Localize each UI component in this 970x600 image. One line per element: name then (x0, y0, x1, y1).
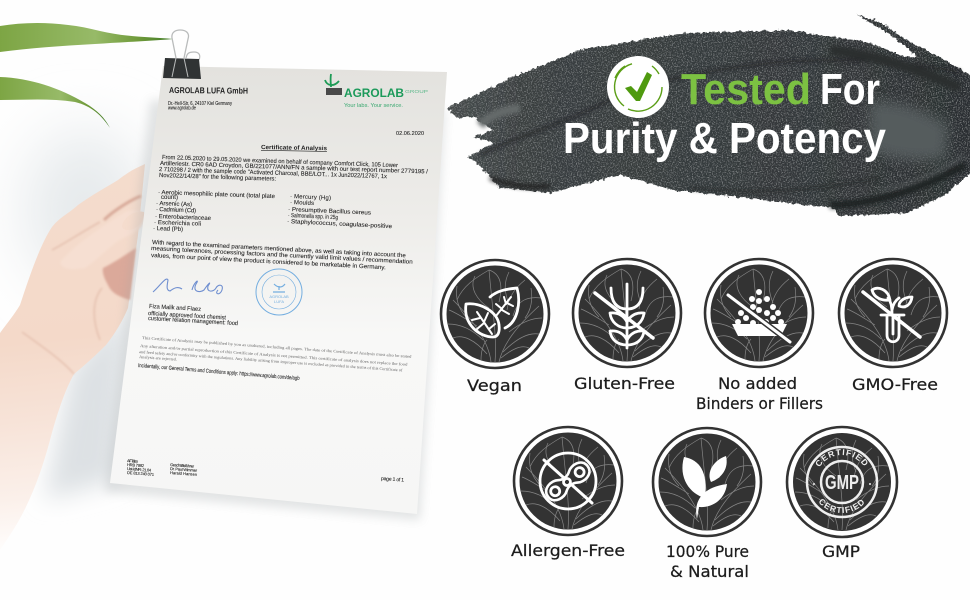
badge: vegan (441, 260, 549, 368)
footer address: Harald Hansen (170, 470, 197, 477)
agrolab logo: AGROLAB (344, 86, 404, 100)
signatory: customer relation management: food (148, 316, 238, 327)
agrolab logo (325, 74, 428, 109)
label: 100% pure and natural: & Natural (670, 562, 749, 581)
parameter list left (153, 190, 276, 233)
label: gmo-free: GMO-Free (852, 375, 938, 394)
footer address: Geschäftsführer (170, 462, 195, 469)
conclusion paragraph: With regard to the examined parameters mentioned above, as well as taking into account the (152, 240, 407, 259)
badge: allergen-free (514, 427, 622, 535)
icon: green check badge (607, 56, 669, 118)
badge: gmp (786, 426, 898, 538)
parameter list right: · Salmonella spp. in 25g (288, 213, 338, 221)
icon: crossed wheat (595, 284, 653, 348)
brush highlight (870, 102, 948, 160)
terms line: Incidentally, our General Terms and Conditions apply: https://www.agrolab.com/de/agb (138, 363, 300, 382)
intro paragraph: Artilleriestr. CR0 6AD Croydon, GB/221077/ANN/FN a sample with our test report number 2779195 / (160, 161, 428, 175)
thumb nail (122, 212, 144, 230)
badge: no added binders or fillers (705, 259, 813, 367)
fine print: This Certificate of Analysis may be published by you as unaltered, including all pages. The date of the Certificate of Analysis must also be stated (142, 335, 412, 360)
badge: gmo-free (839, 259, 947, 367)
certificate title: Certificate of Analysis (261, 145, 328, 152)
conclusion paragraph (151, 240, 413, 271)
badge: gluten-free (573, 259, 681, 367)
brush body (447, 14, 970, 216)
label: 100% pure and natural (666, 542, 749, 581)
footer address: Ust-IdNR: 21.04 (127, 466, 152, 473)
fine print (139, 335, 412, 372)
paper shadow (105, 100, 445, 520)
green leaves (0, 23, 173, 128)
agrolab logo: GROUP (405, 89, 428, 94)
icon: solid leaves (682, 456, 727, 519)
parameter list left: · Cadmium (Cd) (156, 207, 196, 214)
footer address (127, 458, 198, 477)
binder clip (163, 30, 201, 79)
hand holding certificate (0, 164, 145, 550)
heading line one: For (820, 65, 880, 114)
signatory: Fiza Malik and Fiaez (149, 304, 201, 313)
parameter list left: · Aerobic mesophilic plate count (total plate (158, 190, 276, 200)
intro paragraph: From 22.05.2020 to 29.05.2020 we examined on behalf of company Comfort Click, 105 Lower (162, 155, 398, 169)
paper sheet (110, 66, 447, 514)
parameter list left: · Arsenic (As) (156, 201, 192, 208)
label: no added binders or fillers (696, 374, 823, 413)
signature (153, 279, 222, 294)
parameter list left: · Escherichia coli (154, 220, 201, 228)
footer address: DE 813 240 071 (127, 470, 155, 477)
intro paragraph: Nov2022/14/28" for the following parameters: (159, 173, 276, 183)
icon: gmp certified stamp: CERTIFIED (816, 449, 868, 466)
company header (168, 85, 248, 112)
heading line one: Tested (681, 65, 811, 114)
icon: two leaves (466, 288, 519, 337)
conclusion paragraph: values, from our point of view the product is considered to be marketable in Germany. (151, 253, 386, 271)
label: no added binders or fillers: No added (718, 374, 797, 393)
icon: crossed seedling in test tube (863, 288, 920, 342)
parameter list right: · Moulds (290, 200, 314, 207)
parameter list right: · Presumptive Bacillus cereus (288, 207, 371, 217)
label: gluten-free: Gluten-Free (574, 374, 675, 393)
badge: 100% pure and natural (653, 428, 761, 536)
icon: gmp certified stamp (806, 446, 878, 518)
footer address: AFTalso (127, 458, 139, 464)
intro paragraph (159, 155, 428, 183)
company header: www.agrolab.de (168, 106, 196, 112)
certificate paper (110, 66, 447, 514)
fine print: and feed safety and/or conformity with the regulations. Any liability arising from improper use is excluded as provided in the terms of this Certificate of (139, 349, 403, 372)
intro paragraph: 2 710298 / 2 with the sample code "Activated Charcoal, BBE/LOT... 1x Jun2022/12767, 1x (159, 167, 387, 180)
signatory: officially approved food chemist (148, 311, 226, 322)
conclusion paragraph: measuring tolerances, processing factors and the currently valid limit values / recommendation (151, 246, 413, 266)
signatory (148, 304, 238, 327)
label: allergen-free: Allergen-Free (511, 541, 625, 560)
company header: Dr.-Hell-Str. 6, 24107 Kiel Germany (168, 101, 232, 107)
brush creases (480, 50, 965, 205)
shadow between fingers (103, 248, 136, 300)
finger crease (104, 196, 141, 220)
fine print: Any alteration and/or partial reproduction of this Certificate of Analysis is not permitted. This certificate of analysis does not replace the food (140, 343, 408, 367)
parameter list left: · Lead (Pb) (153, 226, 183, 233)
leaf: top (0, 23, 173, 52)
palm creases (22, 222, 102, 374)
round stamp: AGROLAB (269, 294, 289, 299)
icon: crossed peanut (540, 453, 596, 509)
fine print: Analysis are rejected. (139, 354, 177, 362)
icon: crossed bowl of granules (728, 289, 790, 342)
footer address: HRB 7892 (127, 462, 145, 468)
icon: gmp certified stamp: GMP (825, 472, 859, 494)
heading line two: Purity & Potency (563, 114, 886, 163)
arm and palm (0, 164, 145, 550)
date: 02.06.2020 (396, 131, 424, 137)
leaf: lower (0, 77, 110, 128)
agrolab logo: Your labs. Your service. (344, 103, 403, 109)
heading (563, 56, 886, 163)
icon: gmp certified stamp: CERTIFIED (819, 499, 864, 513)
parameter list right: · Mercury (Hg) (290, 194, 331, 202)
label: 100% pure and natural: 100% Pure (666, 542, 749, 561)
charcoal brush stroke (447, 14, 970, 216)
parameter list left: · Enterobacteriaceae (155, 214, 212, 222)
thumb (60, 210, 144, 269)
page number: page 1 of 1 (381, 476, 404, 484)
round stamp (256, 269, 302, 315)
parameter list left: count) (161, 195, 178, 201)
company header: AGROLAB LUFA GmbH (169, 85, 248, 96)
round stamp: LUFA (274, 299, 284, 304)
parameter list right (287, 194, 393, 230)
label: vegan: Vegan (467, 376, 522, 395)
label: no added binders or fillers: Binders or Fillers (696, 394, 823, 413)
parameter list right: · Staphylococcus, coagulase-positive (287, 219, 393, 230)
label: gmp: GMP (822, 542, 860, 561)
background shading (25, 130, 145, 500)
footer address: Dr. Paul Wimmer (170, 466, 198, 473)
